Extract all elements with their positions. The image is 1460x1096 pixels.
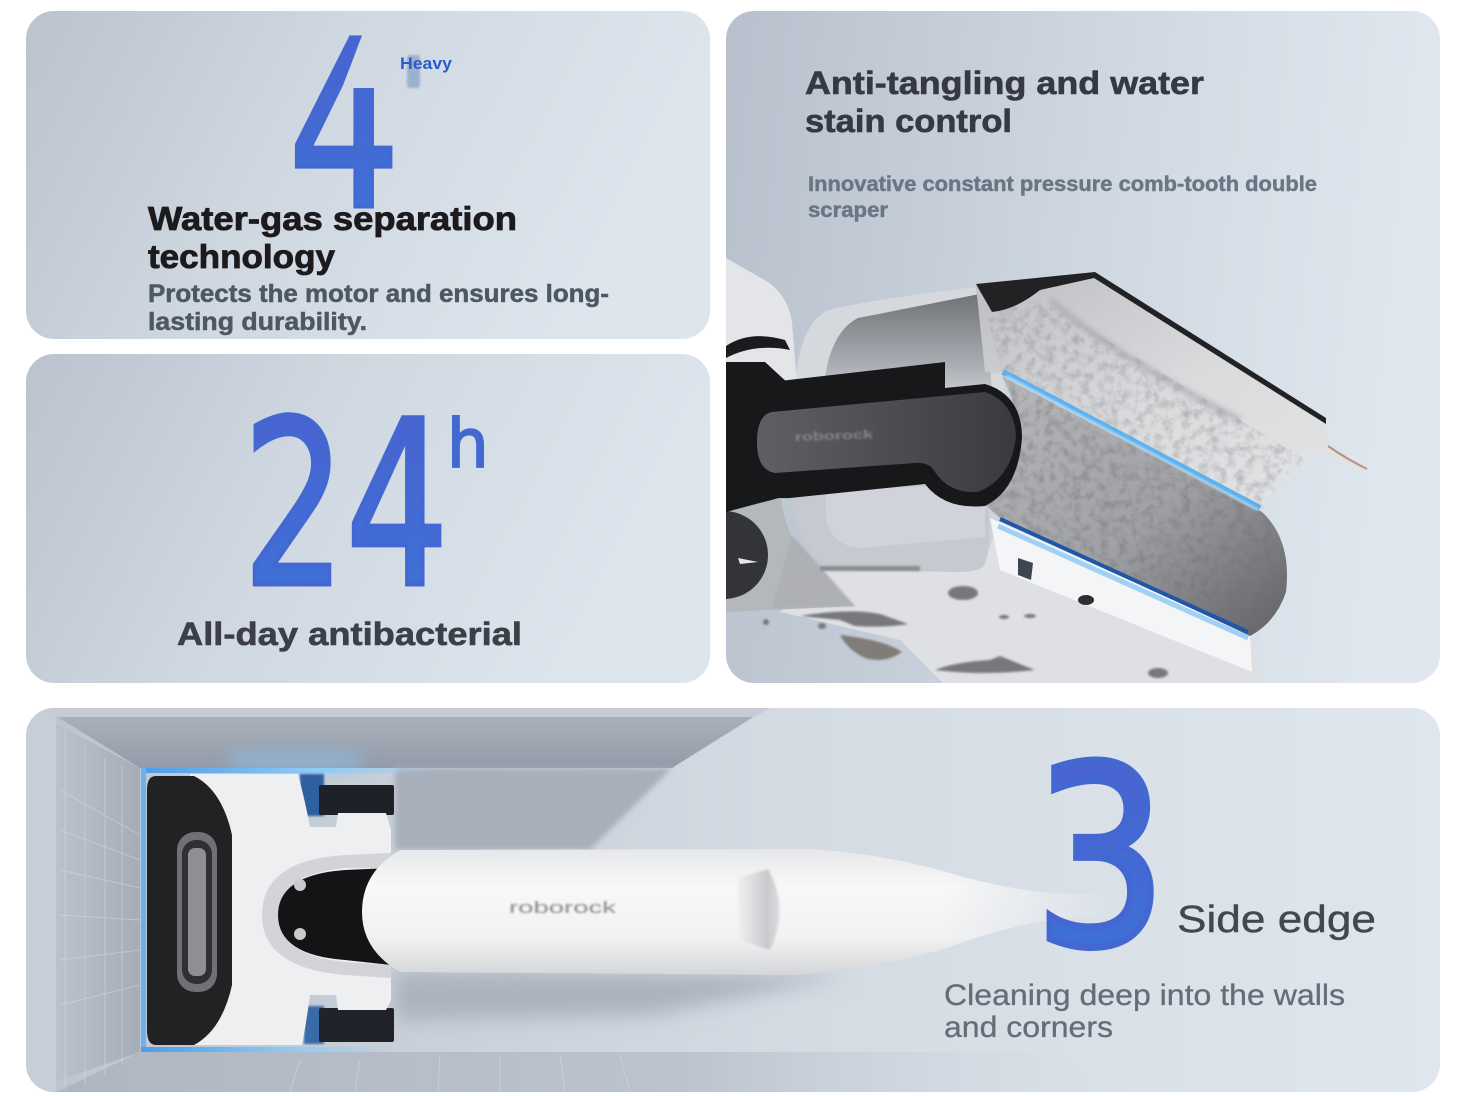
lower grey inset bbox=[826, 485, 985, 548]
plate slot ring bbox=[177, 832, 217, 992]
roller bbox=[980, 376, 1287, 636]
panel background bbox=[26, 354, 710, 683]
panel: all-day antibacterial bbox=[26, 354, 710, 683]
left wall bbox=[26, 708, 140, 1092]
handle shadow bbox=[395, 972, 850, 1020]
blue frame left bbox=[141, 768, 146, 1052]
stains bbox=[763, 566, 1168, 678]
description: and corners bbox=[944, 1011, 1113, 1044]
superscript label: Heavy bbox=[400, 55, 453, 73]
white front lip bbox=[990, 518, 1252, 672]
pivot ring bbox=[726, 511, 768, 599]
wheel blue reflection top bbox=[300, 774, 324, 816]
white mop body bbox=[190, 774, 391, 1045]
grey cap plate bbox=[757, 392, 1016, 492]
big number 24: 24 bbox=[243, 372, 449, 638]
top wall shade bbox=[56, 716, 755, 768]
yoke arch bbox=[262, 853, 391, 978]
translucent upper cover bbox=[976, 273, 1367, 512]
floor strip bbox=[56, 1052, 1100, 1092]
handle window bbox=[738, 869, 780, 950]
plate slot dark bbox=[182, 840, 212, 984]
blue light strip upper highlight bbox=[1006, 376, 1258, 510]
cover texture bbox=[985, 300, 1310, 512]
description: lasting durability. bbox=[148, 308, 367, 336]
smudge behind superscript bbox=[407, 55, 420, 88]
superscript h: h bbox=[447, 404, 489, 483]
panel: water-gas separation bbox=[26, 0, 710, 339]
panel: anti-tangling bbox=[680, 11, 1440, 690]
black cap bbox=[779, 362, 1022, 506]
illustration: mop along a wall bbox=[26, 708, 1130, 1092]
joint bolts bbox=[294, 879, 306, 940]
corner floor shade bbox=[395, 768, 672, 850]
top blue glow bbox=[230, 752, 360, 772]
handle body bbox=[362, 849, 1130, 975]
cover fold bbox=[1050, 300, 1240, 420]
blue light strip lower bbox=[998, 526, 1248, 638]
wall grid bbox=[60, 730, 630, 1092]
grey housing inner bbox=[824, 293, 992, 392]
panel background bbox=[26, 708, 1440, 1092]
heading: Anti-tangling and water bbox=[805, 65, 1204, 101]
clip hole bbox=[1078, 595, 1094, 605]
black front plate bbox=[147, 776, 232, 1045]
grey housing rim bbox=[796, 287, 1005, 394]
handle top bbox=[726, 258, 796, 380]
heading: stain control bbox=[805, 103, 1012, 139]
cap logo: roborock bbox=[795, 427, 874, 444]
wheel blue reflection bottom bbox=[304, 1006, 324, 1044]
blue frame bottom bbox=[141, 1047, 391, 1052]
left dark column bbox=[726, 362, 790, 512]
plate slot window bbox=[188, 848, 206, 976]
pivot glint bbox=[738, 558, 758, 564]
cover dark top edge bbox=[976, 272, 1326, 424]
description: Innovative constant pressure comb-tooth double bbox=[808, 173, 1317, 196]
rear wheel bottom bbox=[319, 1008, 394, 1042]
illustration: mop head close-up bbox=[680, 258, 1367, 690]
handle logo: roborock bbox=[509, 898, 617, 917]
heading: All-day antibacterial bbox=[177, 616, 522, 652]
panel: side edge bbox=[26, 708, 1440, 1092]
black band bbox=[726, 336, 790, 358]
lower grey body bbox=[878, 484, 990, 572]
top wall lip bbox=[40, 708, 770, 717]
description: Protects the motor and ensures long- bbox=[148, 280, 609, 308]
outer wall edge bbox=[34, 710, 56, 1092]
panel background bbox=[726, 11, 1440, 683]
rear wheel top bbox=[319, 785, 394, 815]
blue light strip upper bbox=[1003, 372, 1260, 508]
clip slot bbox=[1018, 558, 1033, 580]
roller texture bbox=[980, 376, 1287, 636]
heading: Water-gas separation bbox=[148, 200, 517, 237]
description: scraper bbox=[808, 199, 888, 222]
heading: technology bbox=[148, 238, 336, 275]
floor plate bbox=[780, 521, 1208, 683]
cover tail tip bbox=[1328, 446, 1367, 469]
big number 3: 3 bbox=[1034, 714, 1168, 1003]
lower connector bbox=[726, 490, 855, 612]
panel background bbox=[26, 11, 710, 339]
blue light strip lower dark bbox=[1000, 519, 1248, 632]
blue frame top bbox=[141, 768, 431, 773]
joint black bbox=[278, 868, 391, 965]
description: Cleaning deep into the walls bbox=[944, 979, 1345, 1012]
connector shadow triangle bbox=[792, 536, 855, 608]
heading: Side edge bbox=[1177, 899, 1376, 941]
